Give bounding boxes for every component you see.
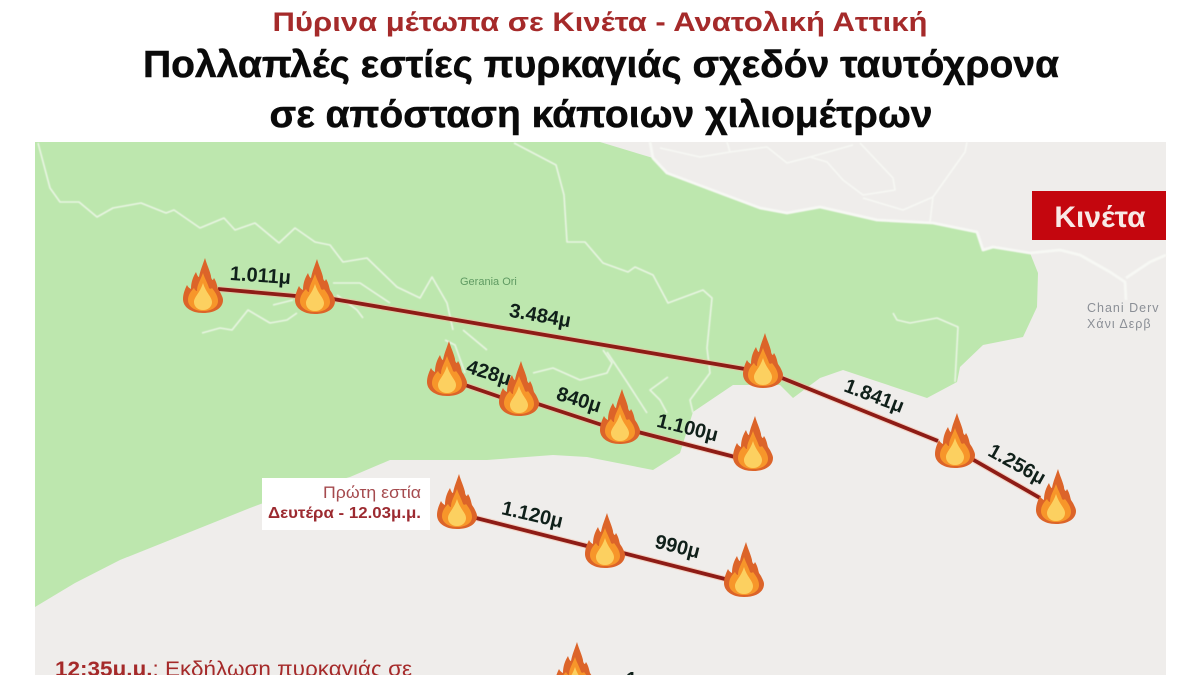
callout: first fire: Δευτέρα - 12.03μ.μ. (268, 505, 421, 522)
distance labels: 1.256μ (984, 440, 1049, 489)
green forest area (35, 142, 1038, 607)
distance lines (218, 289, 1040, 579)
subtitle: Πύρινα μέτωπα σε Κινέτα - Ανατολική Αττική (272, 7, 928, 37)
roads (38, 142, 1166, 413)
map label: Chani Derveni: Χάνι Δερβ (1087, 317, 1152, 331)
label: Kineta: Κινέτα (1054, 201, 1146, 234)
title (143, 44, 1059, 136)
distance labels: 1.100μ (655, 410, 720, 446)
title: Πολλαπλές εστίες πυρκαγιάς σχεδόν ταυτόχρονα (143, 44, 1059, 86)
title: σε απόσταση κάποιων χιλιομέτρων (270, 94, 932, 136)
distance labels: 428μ (464, 356, 514, 390)
map label: Gerania Ori: Gerania Ori (460, 276, 517, 288)
map background (35, 142, 1166, 675)
map label: Chani Derveni: Chani Derv (1087, 301, 1160, 315)
fire icons (183, 258, 1076, 675)
distance labels: 1.841μ (841, 375, 907, 418)
distance labels: 1.011μ (229, 263, 292, 289)
callout: first fire (262, 478, 430, 530)
label: Kineta (1032, 191, 1166, 240)
callout: first fire: Πρώτη εστία (323, 484, 421, 502)
distance labels: 990μ (653, 531, 702, 563)
distance labels: 840μ (554, 383, 604, 417)
distance labels: 3.484μ (507, 300, 573, 332)
distance labels (229, 263, 1049, 675)
distance labels: 1.120μ (500, 497, 565, 533)
